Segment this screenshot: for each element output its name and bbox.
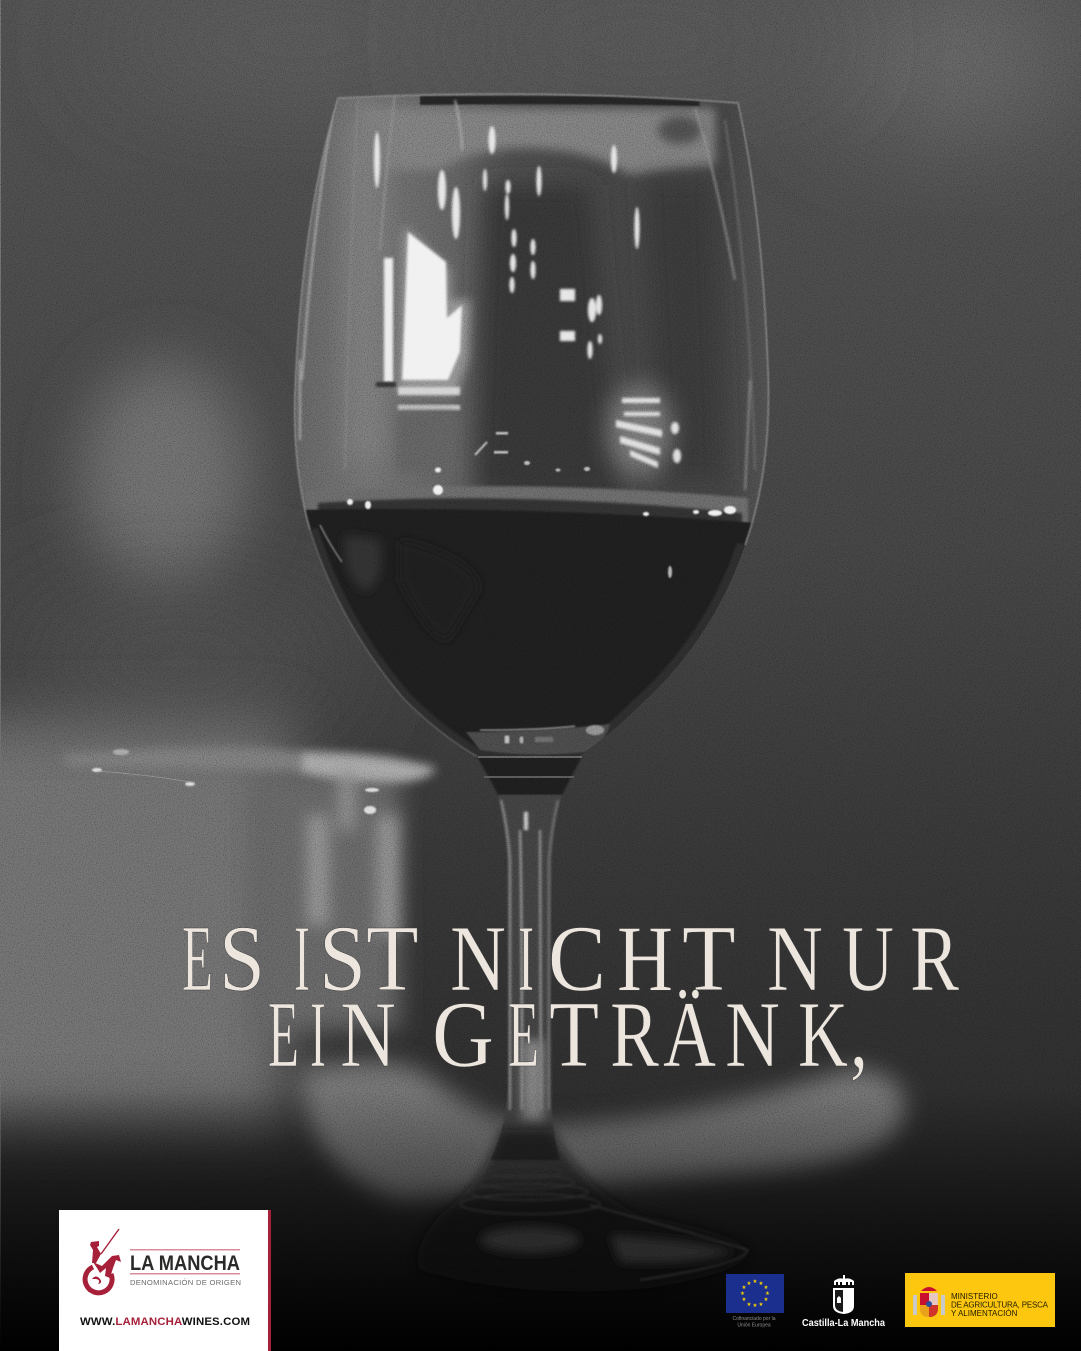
heading line 2: T [549,983,599,1087]
blurred tumbler glass [0,720,436,1120]
heading line 2: R [610,983,659,1087]
EU caption: Cofinanciado por la [732,1316,776,1322]
logo rules [130,1249,240,1250]
region name: Castilla-La Mancha [802,1318,885,1329]
stem [490,795,562,1160]
heading line 1: I [294,907,310,1011]
heading line 1: E [182,907,213,1011]
heading line 2: E [268,983,299,1087]
EU stars: ★ [759,1302,764,1308]
blurred light circle [80,360,250,590]
rim shadow [420,96,700,106]
logo name: LA MANCHA [130,1252,240,1275]
heading line 1: C [548,907,606,1011]
ministry name: DE AGRICULTURA, PESCA [951,1300,1049,1310]
bottom fade [0,1090,1081,1351]
wine [305,508,752,748]
heading line 2: E [508,983,539,1087]
bowl interior [290,90,780,770]
EU stars: ★ [747,1302,752,1308]
stem collar [477,757,582,795]
EU stars [740,1279,770,1309]
heading line 2: Ä [663,983,716,1087]
heading line 2: K [798,983,848,1087]
ministry name: Y ALIMENTACIÓN [951,1309,1018,1318]
EU stars: ★ [765,1291,770,1297]
bowl outline [295,94,769,545]
ministry logo [905,1273,1055,1327]
heading line 1: T [682,907,734,1011]
heading line 1: S [319,907,366,1011]
heading line 1: S [219,907,265,1011]
side glints [300,95,755,490]
surface glints [347,468,736,578]
EU stars: ★ [742,1297,747,1303]
EU stars: ★ [747,1281,752,1287]
crown [834,1275,854,1285]
glass foot [418,1130,748,1291]
EU stars: ★ [764,1297,769,1303]
heading line 1: N [450,907,506,1011]
tumbler streaks [308,770,398,935]
heading line 1: H [617,907,673,1011]
bowl base reflection [466,724,610,755]
heading line 2: N [340,983,396,1087]
heading line 1: T [366,907,417,1011]
heading line 1: R [910,907,959,1011]
blurred white cuff [300,1060,905,1200]
heading line 2: N [725,983,780,1087]
logo card [59,1210,271,1351]
lower right reflection [608,384,672,476]
heading line 1: I [518,907,534,1011]
heading [182,907,959,1087]
Castilla-La Mancha logo [802,1275,885,1329]
red edge [268,1210,271,1351]
stem highlights [501,800,558,1110]
streak highlights [374,126,640,359]
center floor dots [475,432,590,472]
EU stars: ★ [753,1303,758,1309]
heading line 2: I [310,983,326,1087]
wine rim band [310,530,745,757]
heading line 1: N [767,907,823,1011]
EU stars: ★ [759,1281,764,1287]
icon: La Mancha rider [85,1229,121,1293]
window reflection [398,225,470,395]
heading line 1: U [842,907,894,1011]
EU caption: Unión Europea [737,1322,771,1328]
logo subtitle: DENOMINACIÓN DE ORIGEN [130,1278,241,1287]
EU logo [726,1274,784,1328]
heading line 2: , [850,983,868,1087]
wine surface [364,485,749,523]
ministry name: MINISTERIO [951,1292,998,1301]
EU stars: ★ [753,1279,758,1285]
tumbler glints [92,749,379,814]
EU stars: ★ [742,1285,747,1291]
heading line 2: G [432,983,494,1087]
website: WWW.LAMANCHAWINES.COM [80,1316,250,1328]
shield [833,1288,854,1314]
EU stars: ★ [740,1291,745,1297]
EU stars: ★ [764,1285,769,1291]
Spanish crest [913,1287,945,1317]
wine refraction [345,535,381,590]
